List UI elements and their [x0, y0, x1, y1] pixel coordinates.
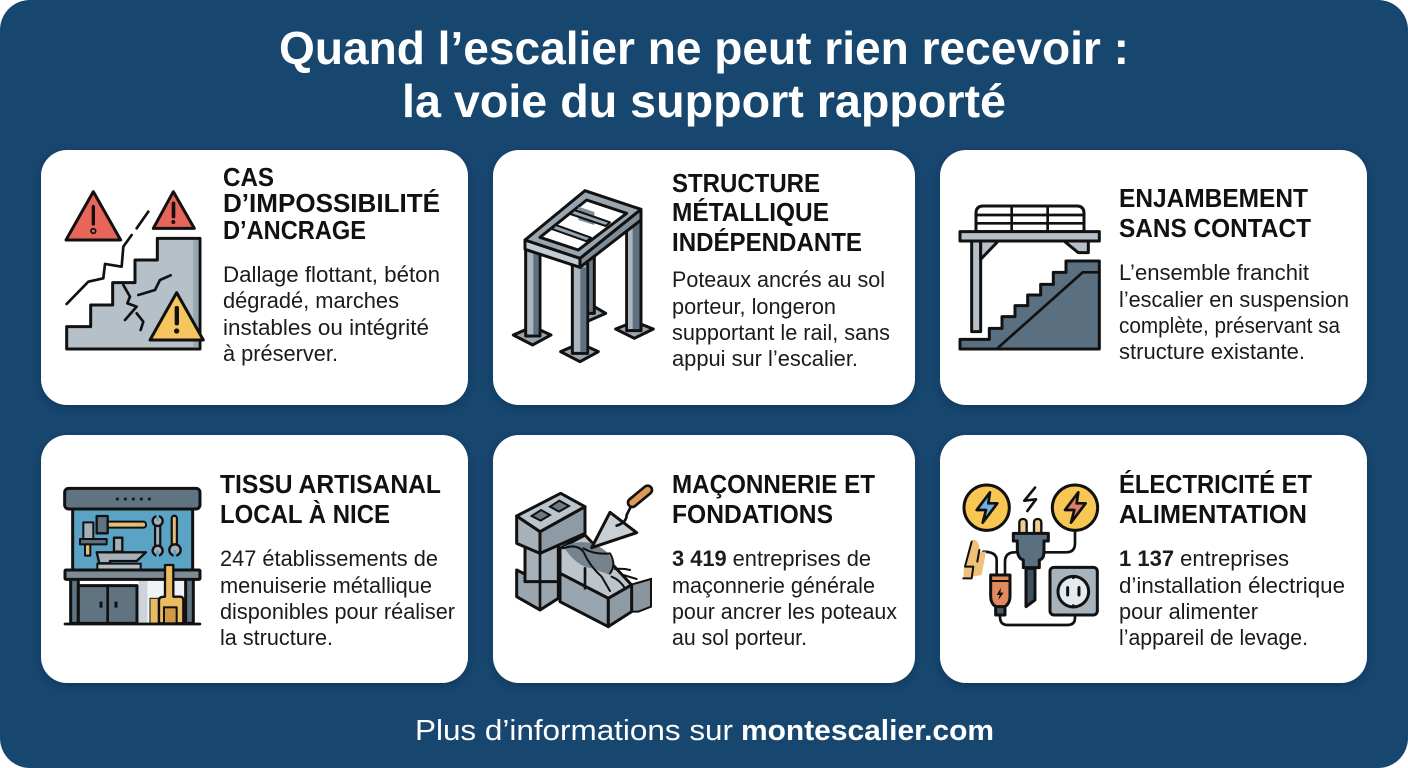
card heading [1119, 185, 1311, 243]
card text: Poteaux ancrés au sol [672, 267, 885, 292]
card heading: INDÉPENDANTE [672, 228, 862, 257]
card text: porteur, longeron [672, 294, 836, 319]
icon: concrete blocks and trowel [517, 490, 651, 627]
card text: l’escalier en suspension [1119, 287, 1349, 312]
card heading: MÉTALLIQUE [672, 198, 829, 227]
card heading [672, 471, 875, 529]
title: la voie du support rapporté [402, 75, 1006, 127]
card heading: FONDATIONS [672, 501, 833, 529]
card text: pour ancrer les poteaux [672, 599, 898, 624]
card text [223, 262, 440, 366]
card heading: SANS CONTACT [1119, 215, 1311, 243]
card heading: LOCAL À NICE [220, 500, 390, 529]
card text: instables ou intégrité [223, 315, 429, 340]
title: Quand l’escalier ne peut rien recevoir : [279, 22, 1129, 74]
card text: disponibles pour réaliser [220, 599, 455, 624]
footer [415, 715, 994, 747]
card heading [220, 471, 441, 529]
card text: l’appareil de levage. [1119, 625, 1308, 650]
footer: montescalier.com [741, 715, 994, 747]
card text: d’installation électrique [1119, 573, 1345, 598]
card heading: MAÇONNERIE ET [672, 471, 875, 499]
card heading: ALIMENTATION [1119, 501, 1307, 529]
icon: plug, socket and lightning [963, 485, 1098, 625]
card text: maçonnerie générale [672, 573, 875, 598]
title [279, 22, 1129, 127]
panel: maçonnerie et fondations [493, 435, 915, 683]
card heading: STRUCTURE [672, 170, 820, 198]
icon: metal frame structure [513, 191, 653, 362]
card text: appui sur l’escalier. [672, 346, 858, 371]
panel: enjambement sans contact [940, 150, 1367, 405]
card text: supportant le rail, sans [672, 320, 890, 345]
card text: L’ensemble franchit [1119, 260, 1310, 285]
panel: cas d'impossibilité d'ancrage [41, 150, 468, 405]
card text: dégradé, marches [223, 288, 399, 313]
card text [1119, 260, 1349, 364]
card heading [223, 164, 440, 245]
card text: 1 137 entreprises [1119, 546, 1289, 571]
card heading: D’ANCRAGE [223, 217, 366, 245]
card text: complète, préservant sa [1119, 313, 1340, 338]
card text: menuiserie métallique [220, 573, 432, 598]
card text: structure existante. [1119, 339, 1305, 364]
panel: tissu artisanal local à Nice [41, 435, 468, 683]
card text: pour alimenter [1119, 599, 1258, 624]
icon: bridge over stairs [960, 206, 1099, 349]
card text: 3 419 entreprises de [672, 546, 871, 571]
icon: workshop bench with tools [65, 488, 200, 624]
card heading: ENJAMBEMENT [1119, 185, 1308, 213]
card text [220, 546, 455, 650]
card text [672, 546, 898, 650]
icon: cracked stairs with warnings [66, 192, 203, 349]
footer: Plus d’informations sur [415, 715, 733, 747]
card text: 247 établissements de [220, 546, 438, 571]
panel: structure métallique indépendante [493, 150, 915, 405]
card text [1119, 546, 1345, 650]
card text: la structure. [220, 625, 333, 650]
card heading: ÉLECTRICITÉ ET [1119, 470, 1312, 499]
card text: à préserver. [223, 341, 338, 366]
card text [672, 267, 890, 371]
card text: Dallage flottant, béton [223, 262, 440, 287]
card heading [1119, 470, 1312, 529]
card heading: CAS [223, 164, 274, 192]
card heading: D’IMPOSSIBILITÉ [223, 189, 440, 218]
card text: au sol porteur. [672, 625, 807, 650]
panel: électricité et alimentation [940, 435, 1367, 683]
card heading [672, 170, 862, 257]
card heading: TISSU ARTISANAL [220, 471, 441, 499]
